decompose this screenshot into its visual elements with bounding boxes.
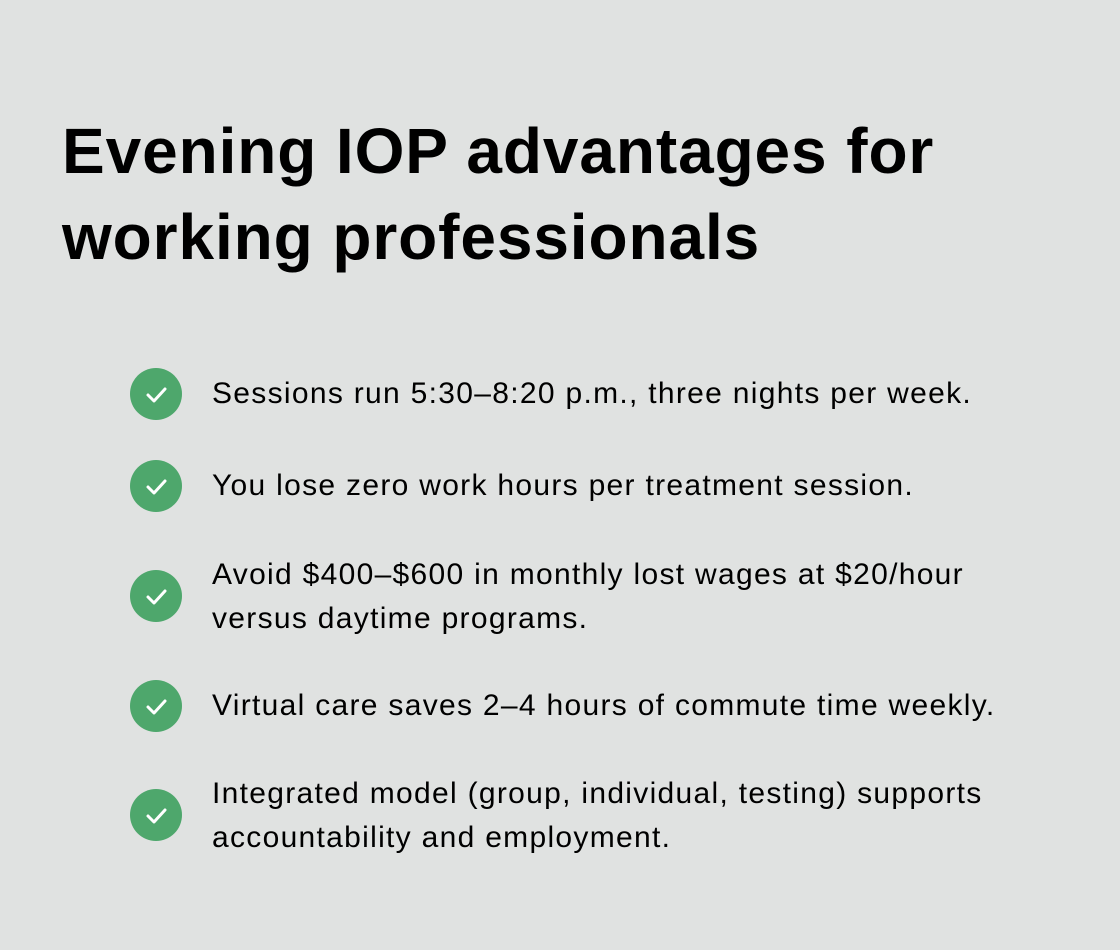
icon: check <box>130 570 182 622</box>
text: accountability and employment. <box>212 821 671 854</box>
item 4 <box>130 680 995 732</box>
title: Evening IOP advantages for <box>62 115 934 187</box>
text: versus daytime programs. <box>212 602 588 635</box>
icon: check <box>130 789 182 841</box>
item 3 <box>130 558 964 635</box>
item 1 <box>130 368 972 420</box>
text: Avoid $400–$600 in monthly lost wages at $20/hour <box>212 558 964 591</box>
item 5 <box>130 777 983 854</box>
icon: check <box>130 460 182 512</box>
icon: check <box>130 368 182 420</box>
title: working professionals <box>62 201 760 273</box>
text: Sessions run 5:30–8:20 p.m., three nights per week. <box>212 377 972 410</box>
text: Virtual care saves 2–4 hours of commute time weekly. <box>212 689 995 722</box>
text <box>212 777 983 854</box>
item 2 <box>130 460 914 512</box>
title <box>62 115 934 273</box>
icon: check <box>130 680 182 732</box>
text <box>212 558 964 635</box>
text: You lose zero work hours per treatment session. <box>212 469 914 502</box>
text: Integrated model (group, individual, testing) supports <box>212 777 983 810</box>
